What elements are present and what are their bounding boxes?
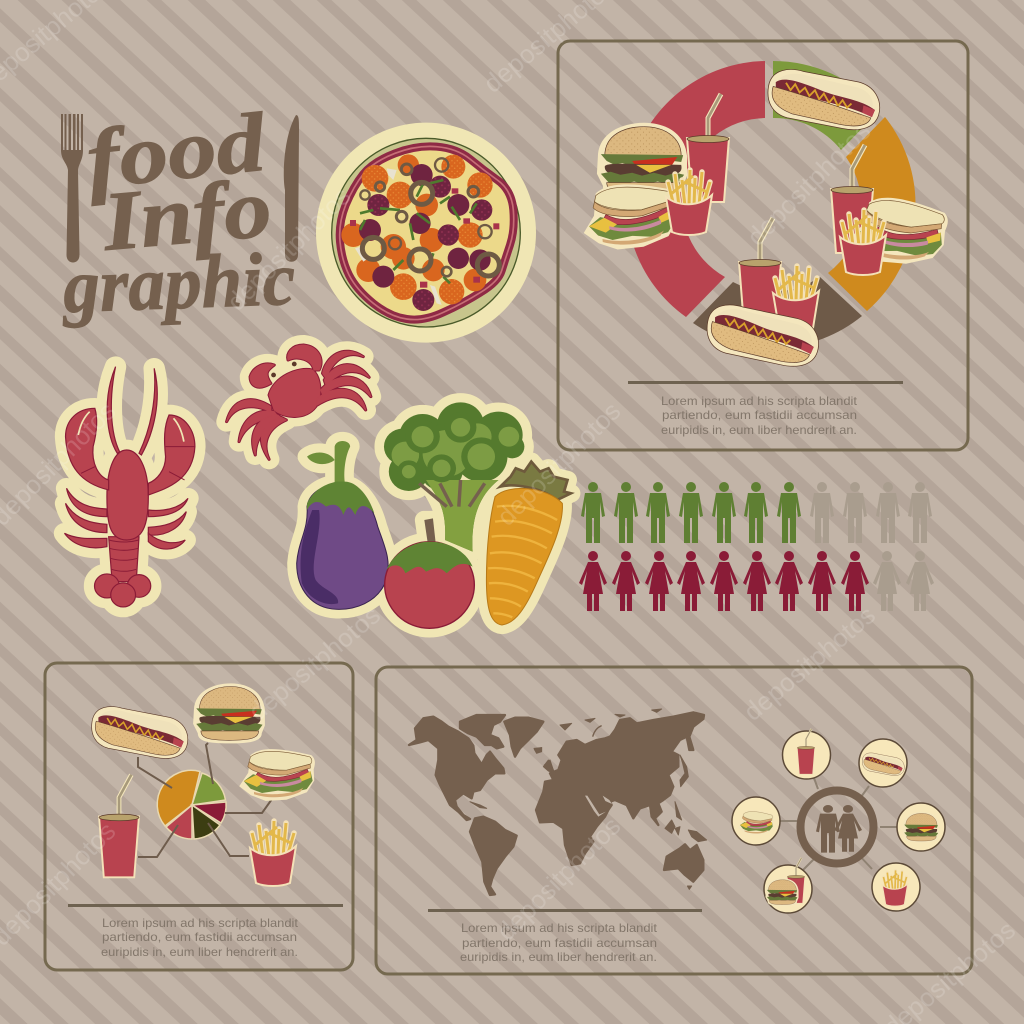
connector lines	[138, 743, 272, 857]
vegetables group	[297, 402, 571, 628]
icon: fries	[250, 821, 296, 886]
crust	[340, 146, 514, 320]
text block: Lorem ipsum ad his scripta blandit	[661, 394, 858, 408]
text block: partiendo, eum fastidii accumsan	[662, 408, 857, 422]
title: fork, food info graphic lettering and knife	[60, 96, 299, 329]
panel: world map and people	[376, 667, 972, 974]
icon: burger	[597, 123, 687, 198]
pictogram row: women, 9 of 11 red	[579, 551, 934, 611]
icon: hot dog top	[764, 66, 884, 134]
heading: food: food	[82, 96, 271, 207]
olives	[360, 158, 499, 276]
icon: drink bottom	[739, 218, 781, 326]
divider	[628, 381, 903, 384]
heading: graphic: graphic	[60, 237, 296, 329]
pictogram row: men, 7 of 11 green	[581, 482, 932, 543]
icon circle: burger and drink	[764, 858, 812, 913]
watermarks: depositphotos	[243, 600, 386, 727]
icon: eggplant	[297, 441, 388, 609]
text block: partiendo, eum fastidii accumsan	[462, 936, 657, 950]
icon circle: sandwich	[732, 797, 780, 845]
icon: couple	[816, 805, 862, 853]
icon: fries right	[840, 210, 886, 275]
world map	[409, 709, 707, 895]
icon circle: fries	[872, 863, 920, 911]
icon: knife	[284, 115, 299, 262]
icon: tomato	[385, 518, 474, 628]
panel frame	[376, 667, 972, 974]
icon: fries left	[666, 170, 712, 235]
text block: partiendo, eum fastidii accumsan	[102, 930, 297, 944]
icon: sandwich	[237, 747, 317, 802]
panel: ring chart with fast food	[558, 41, 968, 450]
text block	[460, 921, 658, 964]
icon circle: drink	[782, 729, 830, 779]
divider	[428, 909, 702, 912]
herbs and pepper bits	[350, 168, 499, 305]
text block: euripidis in, eum liber hendrerit an.	[101, 945, 298, 959]
text block: Lorem ipsum ad his scripta blandit	[461, 921, 658, 935]
icon: sandwich right	[848, 195, 949, 267]
text block	[101, 916, 299, 959]
text block: Lorem ipsum ad his scripta blandit	[102, 916, 299, 930]
icon: fork	[61, 114, 83, 262]
map: Eurasia, Africa, Australia	[534, 709, 707, 889]
icon: burger	[193, 683, 265, 743]
panel: pie chart with fast food	[45, 663, 353, 970]
salami	[359, 164, 492, 311]
watermarks: depositphotos	[491, 396, 626, 531]
divider	[68, 904, 343, 907]
connectors	[780, 778, 897, 870]
ring chart	[627, 61, 915, 348]
text block: euripidis in, eum liber hendrerit an.	[661, 423, 857, 437]
lobster	[64, 367, 195, 607]
heading: Info: Info	[98, 162, 275, 269]
icon: carrot	[486, 462, 571, 625]
text block	[661, 394, 858, 437]
icon circle: hot dog	[859, 739, 907, 787]
icon: hot dog bottom	[703, 301, 823, 371]
panel frame	[558, 41, 968, 450]
cream sticker backing	[297, 402, 571, 628]
panel frame	[45, 663, 353, 970]
watermarks: depositphotos	[741, 116, 876, 251]
icon: drink right	[831, 145, 873, 253]
icon: fries bottom	[773, 266, 819, 331]
watermarks: depositphotos	[738, 600, 881, 727]
map: Americas and Greenland	[409, 715, 553, 895]
icon: hot dog	[88, 704, 191, 762]
plate	[316, 123, 536, 343]
icon circle: burger	[897, 803, 945, 851]
ring	[800, 790, 874, 864]
icon: drink left	[687, 94, 729, 202]
pepperoni	[341, 154, 493, 304]
people radial diagram	[732, 729, 945, 913]
watermarks: depositphotos	[491, 811, 626, 946]
pizza illustration	[316, 123, 536, 343]
watermarks: depositphotos	[221, 181, 356, 316]
pie chart	[157, 770, 226, 839]
crab	[227, 345, 371, 459]
text block: euripidis in, eum liber hendrerit an.	[460, 950, 657, 964]
icon: sandwich left	[579, 179, 681, 253]
icon: drink	[99, 775, 139, 877]
icon: broccoli	[384, 402, 524, 552]
